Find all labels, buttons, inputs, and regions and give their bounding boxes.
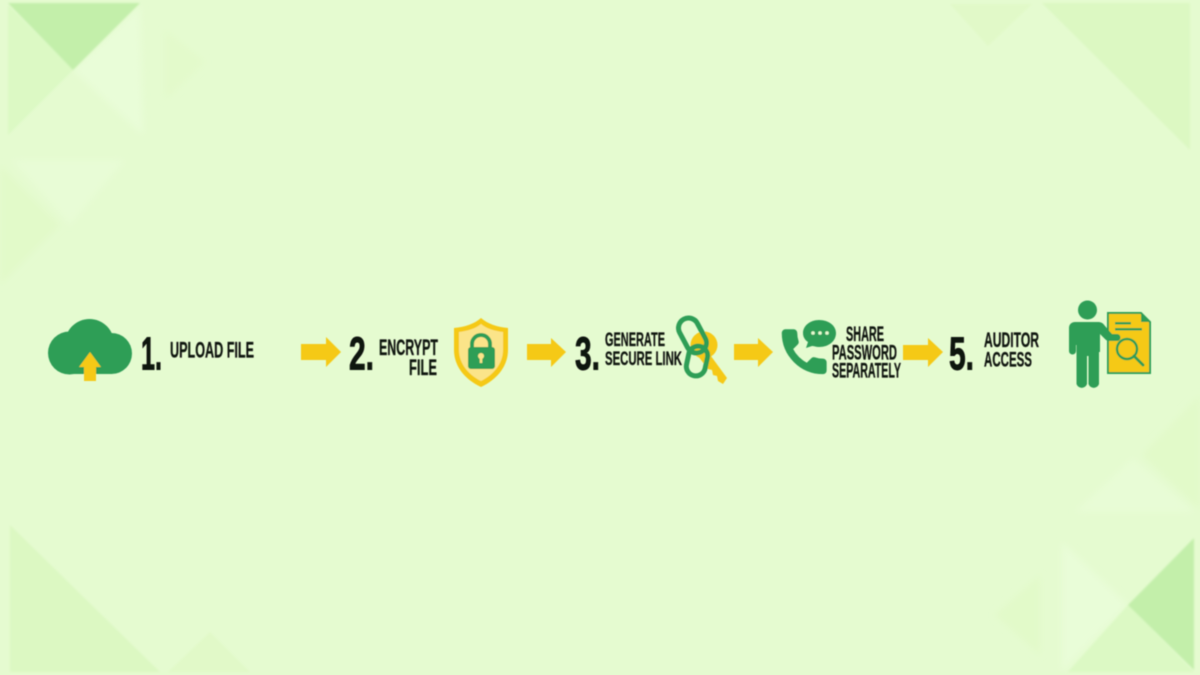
label: encrypt file: ENCRYPT bbox=[379, 335, 438, 360]
label: share password separately: SHARE bbox=[846, 323, 884, 346]
step 2: encrypt file bbox=[349, 318, 508, 387]
arrow 1 bbox=[301, 337, 341, 367]
label: encrypt file bbox=[379, 335, 438, 380]
label: share password separately bbox=[832, 323, 901, 382]
label: share password separately: SEPARATELY bbox=[832, 360, 901, 382]
corner triangles: bottom right bbox=[995, 395, 1200, 672]
label: generate secure link: GENERATE bbox=[605, 329, 665, 351]
step number 1: 1. bbox=[141, 328, 162, 380]
label: auditor access: ACCESS bbox=[984, 348, 1032, 372]
step 5: auditor access bbox=[949, 300, 1150, 388]
step number 5: 5. bbox=[949, 328, 974, 380]
label: encrypt file: FILE bbox=[409, 355, 437, 380]
label: generate secure link: SECURE LINK bbox=[605, 348, 682, 370]
corner triangles: bottom left bbox=[10, 525, 250, 672]
icon: cloud upload bbox=[48, 319, 132, 381]
icon: shield with padlock bbox=[454, 318, 508, 387]
step number 2: 2. bbox=[349, 328, 374, 380]
icon: chain and key bbox=[675, 314, 727, 384]
icon: phone and chat bubble bbox=[783, 320, 836, 373]
arrow 3 bbox=[734, 338, 773, 367]
arrow 4 bbox=[903, 338, 943, 367]
label: share password separately: PASSWORD bbox=[832, 342, 897, 364]
label: generate secure link bbox=[605, 329, 682, 370]
label: upload file: UPLOAD FILE bbox=[170, 338, 254, 362]
arrow 2 bbox=[527, 338, 566, 367]
corner triangles: top left bbox=[0, 3, 205, 285]
step 3: generate secure link bbox=[575, 314, 727, 384]
step 4: share password separately bbox=[783, 320, 901, 382]
step number 3: 3. bbox=[575, 328, 600, 380]
icon: auditor with document and magnifier bbox=[1069, 300, 1150, 388]
label: auditor access: AUDITOR bbox=[984, 329, 1039, 352]
label: auditor access bbox=[984, 329, 1039, 372]
step 1: upload file bbox=[48, 319, 254, 381]
corner triangles: top right bbox=[950, 3, 1190, 150]
